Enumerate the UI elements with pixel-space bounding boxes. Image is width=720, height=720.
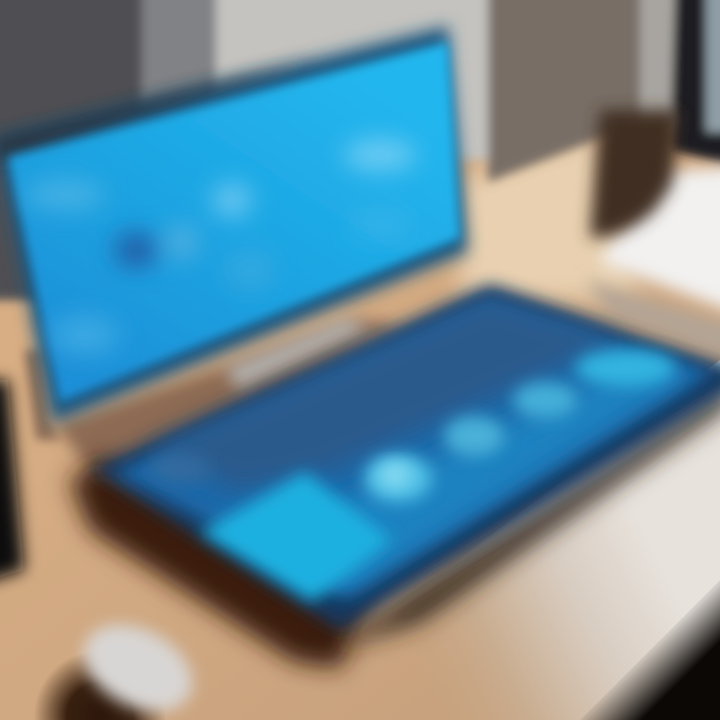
tablet shadow xyxy=(70,460,370,668)
white shelf at right xyxy=(585,165,720,372)
monitor screen xyxy=(8,42,460,402)
tablet grey-navy upper band xyxy=(150,298,620,490)
mouse shadow xyxy=(34,650,166,720)
tablet lower-right shadow xyxy=(330,385,720,650)
white lower-right desk xyxy=(380,360,720,720)
tablet screen xyxy=(115,300,715,598)
wall background xyxy=(0,0,720,300)
black corner lower right xyxy=(580,580,720,720)
tablet xyxy=(70,285,720,668)
tablet light tiles xyxy=(150,350,675,502)
tablet blue lower band xyxy=(260,360,690,590)
monitor frame xyxy=(0,26,468,424)
monitor stand xyxy=(225,318,372,390)
tablet large tile xyxy=(200,472,392,602)
dark cup xyxy=(590,110,680,238)
left dark object xyxy=(0,380,24,590)
mouse xyxy=(34,607,207,720)
mouse body xyxy=(69,607,207,720)
brown shade between monitor and tablet xyxy=(55,320,400,482)
left shade beside monitor foot xyxy=(24,350,60,440)
tablet body xyxy=(92,285,720,630)
monitor xyxy=(0,26,468,424)
screen highlights xyxy=(25,139,416,355)
dark top edge shade xyxy=(0,58,320,162)
